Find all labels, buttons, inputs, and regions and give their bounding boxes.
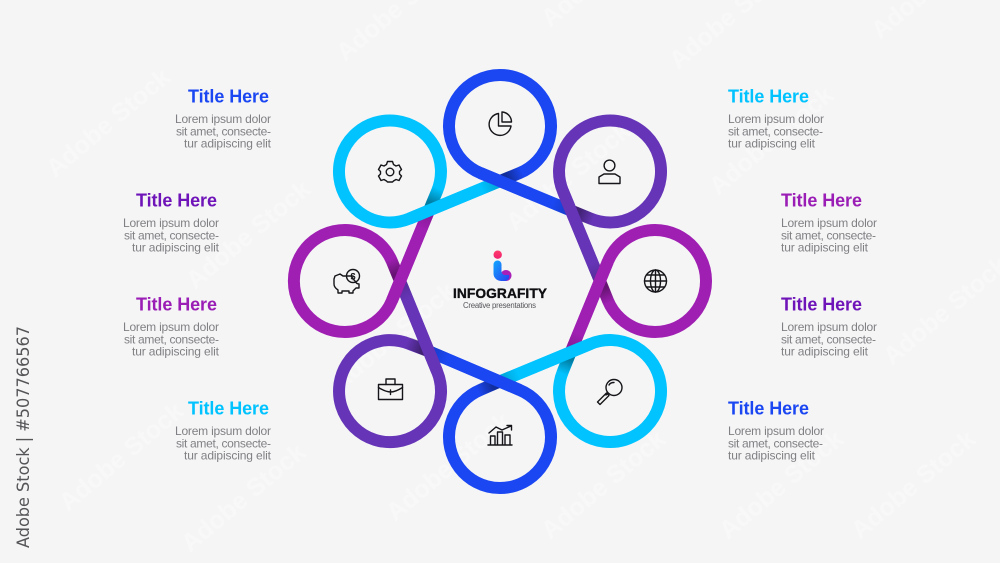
text block: left 4 — [175, 398, 272, 463]
text block: left 1: sit amet, consecte- — [176, 124, 271, 138]
lobe: gear cyan — [339, 120, 500, 231]
top blue tail overlay — [479, 173, 530, 194]
text block: right 2 — [781, 190, 877, 255]
watermark: Adobe Stock — [501, 117, 636, 237]
logo wordmark: INFOGRAFITY — [453, 286, 547, 301]
watermark: Adobe Stock — [536, 425, 671, 545]
text block: left 1 — [175, 86, 272, 151]
text block: right 4: Lorem ipsum dolor — [728, 424, 824, 438]
logo tagline: Creative presentations — [463, 301, 536, 310]
watermark: Adobe Stock — [41, 63, 176, 183]
text block: right 1 — [728, 86, 824, 151]
text block: right 3: sit amet, consecte- — [781, 332, 876, 346]
text block: left 4: Lorem ipsum dolor — [175, 424, 271, 438]
text block: left 3: Title Here — [136, 294, 217, 314]
icon: magnifier — [598, 380, 622, 404]
watermark: Adobe Stock — [54, 397, 189, 517]
text block: left 4: sit amet, consecte- — [176, 436, 271, 450]
text block: left 1: Lorem ipsum dolor — [175, 112, 271, 126]
text block: left 3 — [123, 294, 220, 359]
text block: right 3: Title Here — [781, 294, 862, 314]
text block: right 4 — [728, 398, 824, 463]
watermark: Adobe Stock — [704, 81, 839, 201]
text block: left 4: tur adipiscing elit — [184, 449, 272, 463]
icon: pie chart — [489, 112, 512, 135]
lobe: magnifier cyan — [500, 331, 661, 442]
text block: left 3: tur adipiscing elit — [132, 345, 220, 359]
text block: left 2: tur adipiscing elit — [132, 241, 220, 255]
text block: right 2: tur adipiscing elit — [781, 241, 869, 255]
watermark: Adobe Stock — [714, 425, 849, 545]
text block: right 1: Lorem ipsum dolor — [728, 112, 824, 126]
text block: right 3: tur adipiscing elit — [781, 345, 869, 359]
text block: right 4: Title Here — [728, 398, 809, 418]
watermark: Adobe Stock — [176, 438, 311, 558]
text block: left 3: sit amet, consecte- — [124, 332, 219, 346]
text block: left 4: Title Here — [188, 398, 269, 418]
icon: person — [599, 160, 620, 184]
text block: left 3: Lorem ipsum dolor — [123, 320, 219, 334]
text block: right 3: Lorem ipsum dolor — [781, 320, 877, 334]
icon: gear — [378, 162, 402, 182]
icon: briefcase — [378, 379, 402, 400]
lobe: globe magenta — [571, 230, 706, 351]
text block: right 1: sit amet, consecte- — [728, 124, 823, 138]
text block: right 1: tur adipiscing elit — [728, 137, 816, 151]
looped ring diagram — [294, 75, 706, 488]
icon: piggy bank — [334, 270, 360, 293]
logo mark — [494, 250, 512, 281]
text block: left 2 — [123, 190, 220, 255]
lobe: bottom blue — [429, 351, 551, 488]
text block: left 2: Title Here — [136, 190, 217, 210]
watermark: Adobe Stock — [181, 175, 316, 295]
icon: piggy bank: $ — [350, 272, 356, 282]
text block: right 3 — [781, 294, 877, 359]
text block: right 1: Title Here — [728, 86, 809, 106]
text block: left 2: sit amet, consecte- — [124, 228, 219, 242]
text block: right 4: tur adipiscing elit — [728, 449, 816, 463]
text block: right 2: Title Here — [781, 190, 862, 210]
icon: growth chart — [488, 426, 512, 445]
lobe: person purple — [550, 120, 661, 281]
watermark: Adobe Stock — [846, 425, 981, 545]
watermark: Adobe Stock — [326, 277, 461, 397]
lobe: piggy magenta — [294, 211, 429, 332]
icon: globe — [644, 270, 666, 292]
text block: right 2: Lorem ipsum dolor — [781, 216, 877, 230]
text block: left 2: Lorem ipsum dolor — [123, 216, 219, 230]
watermark: Adobe Stock — [381, 407, 516, 527]
text block: left 1: tur adipiscing elit — [184, 137, 272, 151]
text block: left 1: Title Here — [188, 86, 269, 106]
lobe: top blue — [449, 75, 571, 211]
stock id vertical text: Adobe Stock | #507766567 — [14, 326, 34, 548]
text block: right 4: sit amet, consecte- — [728, 436, 823, 450]
centre logo — [453, 250, 547, 310]
text block: right 2: sit amet, consecte- — [781, 228, 876, 242]
lobe: briefcase purple — [339, 281, 450, 442]
